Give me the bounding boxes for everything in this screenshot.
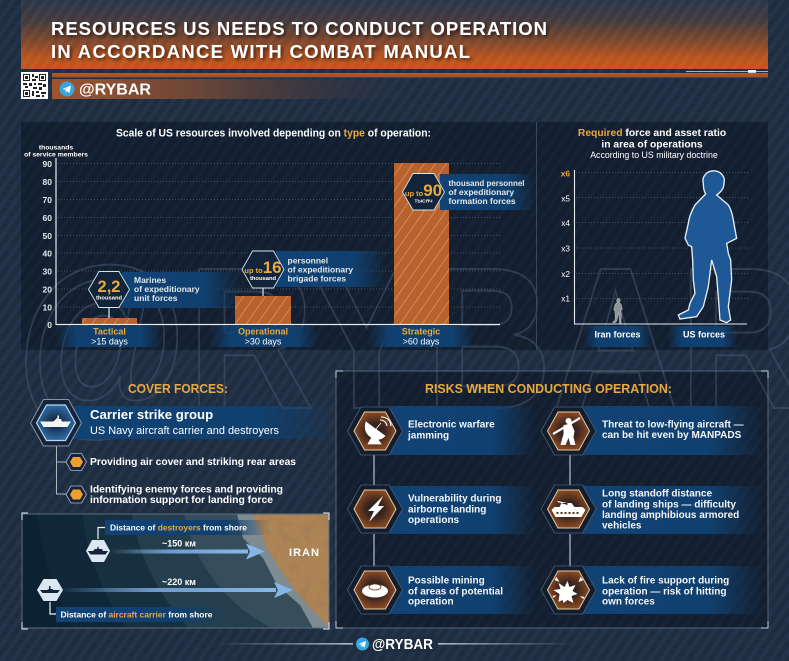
risk: tank: landing amphibious armored [602,510,739,521]
axis caption: thousands [39,144,73,152]
callout: strategic [402,174,524,210]
strategic band [440,174,536,210]
risks heading: RISKS WHEN CONDUCTING OPERATION: [425,381,672,396]
panel: cover forces [30,381,336,506]
ratio axis labels: x1 [561,294,570,304]
category labels: Tactical [93,326,126,336]
ratio axis labels: x6 [561,168,570,178]
chart panel background [21,122,768,350]
ratio heading: According to US military doctrine [590,150,718,160]
item 2: Identifying enemy forces and providing [90,484,283,496]
callout: tactical [88,272,200,318]
ratio labels: Iran forces [594,330,641,340]
y axis labels: 40 [43,248,52,258]
frame [336,371,768,628]
icon: destroyer [86,540,110,562]
callout: operational: brigade forces [288,274,346,284]
y axis labels: 50 [43,231,52,241]
panel divider [536,122,537,350]
callout: strategic: ТЫСЯЧ [415,198,433,204]
category labels: >30 days [245,336,282,346]
title: RESOURCES US NEEDS TO CONDUCT OPERATION [51,18,547,39]
carrier text [90,407,280,437]
y axis labels: 60 [43,213,52,223]
icon: telegram [60,82,74,96]
risk: mining: of areas of potential [408,586,503,598]
label: Iran: IRAN [289,547,320,559]
risk: fire support: operation — risk of hitting [602,586,726,598]
risk bands [390,406,763,614]
ratio heading [578,128,726,160]
risk: fire support: Lack of fire support during [602,576,729,586]
callout: tactical: unit forces [134,293,178,303]
connectors [374,455,570,566]
chart title: Scale of US resources involved depending on type of operation: [116,128,431,140]
ratio axis labels: x5 [561,194,570,204]
risk: tank: of landing ships — difficulty [602,500,736,510]
category labels: >60 days [403,336,440,346]
risk: airborne: airborne landing [408,504,486,516]
risk: fire support: own forces [602,596,655,608]
axis caption: of service members [24,152,88,158]
arrow: destroyers [110,538,265,560]
carrier text: Carrier strike group [90,407,213,422]
footer logo [215,636,575,653]
y axis labels: 0 [47,320,52,330]
risk: manpads: Threat to low-flying aircraft — [602,420,744,430]
callout: operational: personnel [288,256,328,266]
callout: strategic: of expeditionary [448,187,514,197]
QR code [21,72,48,99]
risk: manpads: can be hit even by MANPADS [602,430,742,441]
panel: risks [336,371,768,628]
risk: mining: operation [408,596,454,608]
carrier band [68,406,336,439]
ratio labels [594,330,725,340]
risk: airborne [348,485,502,533]
footer logo: @RYBAR [372,637,433,653]
icon: carrier hex [30,400,82,446]
title [51,18,547,62]
category bands [56,326,474,347]
callout: operational: up to16 [244,258,282,277]
item 2: information support for landing force [90,495,273,506]
arrow: destroyers: ~150 км [162,538,196,548]
panel: bar chart [24,128,536,347]
category labels: Operational [238,326,288,336]
panel: force ratio [561,128,748,347]
ratio axis labels [561,168,570,304]
y axis labels: 10 [43,302,52,312]
arrow: carrier: ~220 км [162,577,196,587]
callout: tactical: 2,2 [98,278,120,296]
bar: operational [235,296,291,324]
soldier: Iran [613,299,622,323]
ratio labels: US forces [683,330,725,340]
icon: telegram footer [356,638,369,650]
y axis labels: 80 [43,177,52,187]
risk: tank [541,485,739,533]
cover heading: COVER FORCES: [128,381,228,396]
label: destroyers [98,520,270,539]
risks panel background [336,371,768,628]
bar: tactical [82,318,137,324]
ratio heading: Required force and asset ratio [578,128,726,139]
corner marks [22,513,329,629]
axes [56,158,500,324]
label: carrier [50,602,226,622]
y axis labels: 70 [43,195,52,205]
callout: tactical: of expeditionary [134,284,200,294]
callout: operational [242,251,353,296]
carrier text: US Navy aircraft carrier and destroyers [90,425,280,437]
risk: airborne: Vulnerability during [408,494,502,504]
sea [22,514,72,628]
header strip [52,70,768,99]
risk: electronic warfare [348,407,495,455]
y axis labels: 30 [43,266,52,276]
arrow: carrier [60,577,293,598]
category labels: Strategic [402,326,440,336]
risk: mining: Possible mining [408,576,485,586]
bar: strategic [394,163,449,324]
risk: tank: vehicles [602,520,642,532]
label: destroyers: Distance of destroyers from shore [110,522,247,532]
callout: operational: of expeditionary [288,264,353,274]
risk: tank: Long standoff distance [602,488,712,500]
y axis labels: 90 [43,159,52,169]
connectors [56,445,67,494]
risk: electronic warfare: Electronic warfare [408,420,495,430]
y axis labels [43,159,52,330]
ratio grid [576,172,748,298]
ratio axis labels: x2 [561,269,570,279]
title: IN ACCORDANCE WITH COMBAT MANUAL [51,41,470,62]
item 1 [66,454,296,470]
header logo: @RYBAR [79,82,151,98]
corner marks [336,371,768,628]
callout: strategic: thousand personnel [448,178,524,188]
callout bands [122,251,386,308]
risk: electronic warfare: jamming [407,430,449,442]
map [22,513,329,629]
map frame [22,514,329,628]
callout: strategic: formation forces [448,196,516,206]
soldier: US [678,171,737,323]
land [237,514,329,628]
icon: carrier [37,579,63,601]
axis caption [24,144,88,158]
callout: tactical: thousand [96,296,122,302]
risk: fire support [541,566,729,614]
header banner [21,0,768,69]
risk: mining [348,566,503,614]
label: carrier: Distance of aircraft carrier from shore [60,610,213,620]
risk: airborne: operations [408,515,460,526]
item 1: Providing air cover and striking rear areas [90,457,296,468]
ratio label bands [584,326,737,347]
category labels: >15 days [91,336,128,346]
y axis labels: 20 [43,284,52,294]
callout: operational: thousand [250,276,276,282]
risk: manpads [541,407,744,455]
callout: strategic: up to90 [405,181,442,200]
ratio axis labels: x4 [561,218,570,228]
ratio axes [574,170,747,324]
ratio axis labels: x3 [561,244,570,254]
ratio heading: in area of operations [601,140,703,150]
callout: tactical: Marines [134,275,166,285]
grid lines [58,164,500,307]
item 2 [66,484,283,506]
category labels [91,326,440,346]
